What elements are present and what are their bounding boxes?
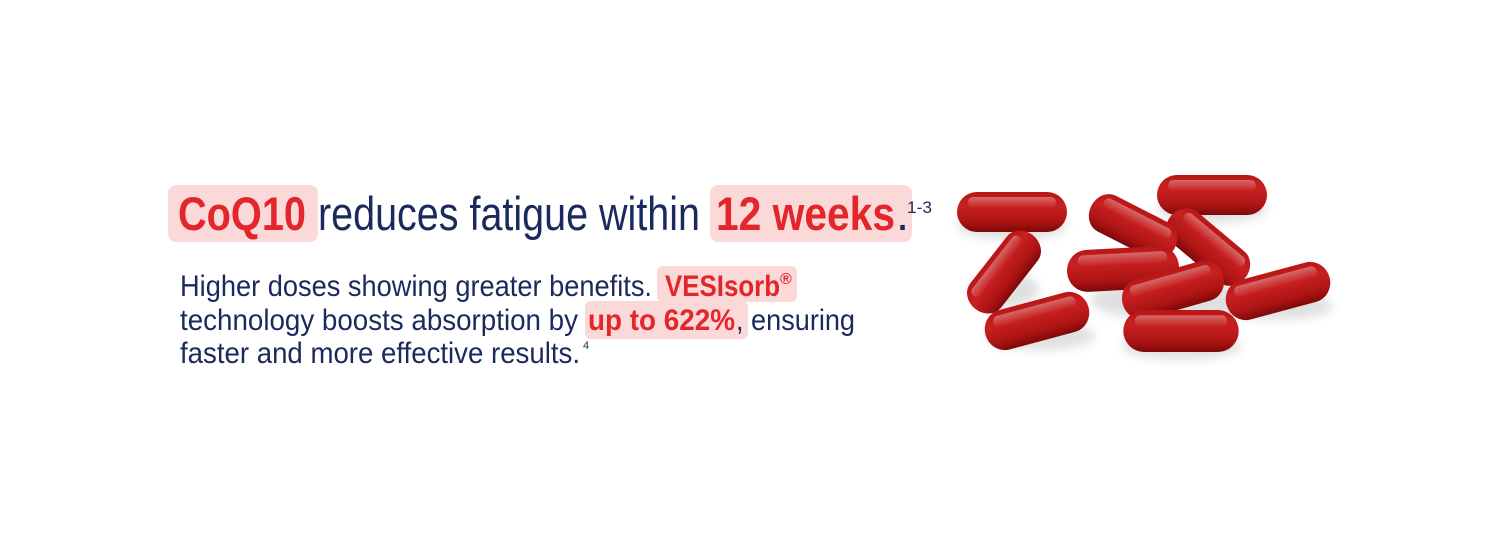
highlight: up to 622% — [585, 301, 748, 339]
title: reduces fatigue within — [318, 187, 700, 240]
title: 1-3 — [907, 198, 932, 217]
body text — [180, 270, 855, 370]
highlight: 12 weeks — [710, 185, 912, 242]
body text: Higher doses showing greater benefits. — [180, 270, 652, 303]
body text: up to 622% — [588, 304, 735, 337]
body text: ® — [780, 271, 792, 288]
title: . — [896, 187, 909, 240]
pills image — [957, 175, 1335, 360]
title — [178, 187, 932, 240]
body text: technology boosts absorption by — [180, 304, 578, 337]
body text: , ensuring — [736, 304, 855, 337]
body text: VESIsorb — [665, 270, 780, 303]
title: 12 weeks — [716, 187, 895, 240]
body text: faster and more effective results. — [180, 337, 580, 370]
highlight: CoQ10 — [168, 185, 318, 242]
title: CoQ10 — [178, 187, 306, 240]
highlight: VESIsorb — [657, 266, 797, 302]
body text: 4 — [583, 340, 589, 352]
